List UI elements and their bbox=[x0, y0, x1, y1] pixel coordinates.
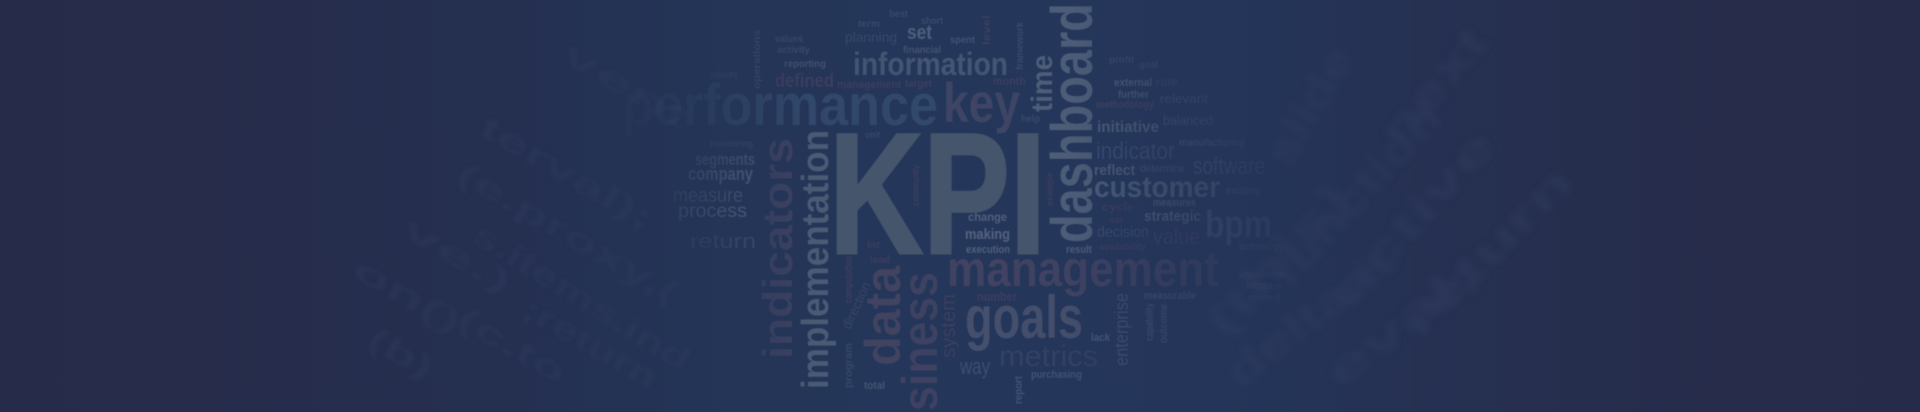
word: key: key bbox=[943, 71, 1020, 134]
reddish words: upper area: community bbox=[911, 165, 922, 206]
word: initiative: initiative bbox=[1097, 119, 1159, 136]
small faint words: upper area: rate bbox=[1156, 75, 1178, 89]
reddish words: lower area: use bbox=[1109, 215, 1124, 226]
small faint words: upper area: short bbox=[921, 16, 944, 27]
reddish words: lower area: number bbox=[977, 289, 1017, 304]
reddish words: upper area: month bbox=[993, 74, 1026, 88]
small faint words: right area: manufacturing bbox=[1179, 137, 1245, 149]
small faint words: left area: return bbox=[690, 231, 756, 253]
small faint words: upper area: profit bbox=[1109, 55, 1135, 66]
small faint words: left area bbox=[673, 150, 890, 392]
small faint words: right area: capability bbox=[1144, 302, 1156, 341]
word: decision: decision bbox=[1097, 224, 1149, 241]
small faint words: right area: relevant bbox=[1160, 91, 1208, 106]
faint rotated background code text, right: (this) bbox=[1196, 173, 1360, 347]
word: further: further bbox=[1118, 89, 1150, 101]
faint rotated background code text, left: ve.) bbox=[396, 210, 518, 301]
word: making: making bbox=[965, 226, 1010, 243]
word: management: management bbox=[947, 241, 1219, 297]
small faint words: right area: technology bbox=[1239, 241, 1284, 253]
reddish words: upper area: level bbox=[982, 15, 993, 45]
small faint words: left area: direction bbox=[838, 279, 874, 331]
small faint words: upper area: industry bbox=[710, 70, 738, 81]
word: system: system bbox=[938, 294, 960, 358]
small faint words: right area: determine bbox=[1140, 163, 1185, 175]
reddish words: upper area: target bbox=[905, 78, 932, 90]
word: external: external bbox=[1114, 77, 1152, 89]
small faint words: right area: software bbox=[1193, 153, 1265, 180]
reddish words: lower area: cycle bbox=[1102, 200, 1134, 214]
small faint words: right area: balanced bbox=[1163, 112, 1213, 128]
small faint words: upper area: reporting bbox=[784, 59, 826, 70]
small faint words: right area: existing bbox=[1226, 185, 1260, 197]
reddish words: upper area bbox=[775, 15, 1056, 206]
small faint words: upper area bbox=[730, 10, 1158, 148]
small faint words: right area: knowledge bbox=[1239, 269, 1285, 281]
small faint words: upper area: planning bbox=[845, 29, 897, 45]
faint rotated background code text, left: (e.proxy,( bbox=[452, 155, 687, 311]
faint rotated background code text, right: active bbox=[1321, 120, 1505, 317]
word: value: value bbox=[1153, 224, 1200, 249]
small faint words: upper area: goal bbox=[1139, 60, 1158, 71]
word: time: time bbox=[1026, 55, 1059, 112]
small faint words: right area: purchasing bbox=[1031, 369, 1082, 381]
word: result: result bbox=[1066, 244, 1092, 256]
small faint words: upper area: unit bbox=[865, 130, 881, 141]
small faint words: right area bbox=[1014, 94, 1242, 404]
word: execution: execution bbox=[966, 244, 1010, 256]
word: siness (cropped business): siness bbox=[892, 272, 948, 411]
faint rotated background code text, right: eval; bbox=[1316, 248, 1488, 398]
small faint words: left area: computation bbox=[843, 256, 855, 303]
faint rotated background code text, left: vent bbox=[556, 35, 696, 136]
faint rotated background code text, left: terval); bbox=[474, 108, 660, 237]
small faint words: upper area: best bbox=[889, 9, 909, 20]
reddish words: upper area: management bbox=[837, 79, 901, 91]
faint rotated background code text, right: next bbox=[1370, 17, 1498, 156]
small faint words: upper area: activity bbox=[777, 45, 810, 56]
small faint words: left area: program bbox=[843, 343, 855, 388]
word: metrics: metrics bbox=[999, 340, 1098, 373]
word: goals: goals bbox=[965, 284, 1083, 351]
small faint words: right area: toward bbox=[1248, 292, 1280, 304]
word: enterprise: enterprise bbox=[1112, 293, 1133, 366]
word: way: way bbox=[959, 354, 990, 379]
title: KPI: KPI bbox=[829, 98, 1046, 290]
word: customer: customer bbox=[1094, 171, 1220, 204]
word: reflect: reflect bbox=[1094, 162, 1135, 179]
word cloud bbox=[675, 6, 1242, 410]
banner background bbox=[357, 0, 1570, 412]
small faint words: left area: process bbox=[678, 201, 747, 222]
word: set: set bbox=[907, 22, 932, 44]
word: information: information bbox=[853, 46, 1008, 82]
faint rotated background code text, right: delta.it bbox=[1216, 236, 1404, 398]
faint rotated background code text, right: slide bbox=[1256, 38, 1364, 175]
reddish words: lower area bbox=[977, 200, 1146, 304]
faint rotated background code text, left: ;return bbox=[516, 290, 664, 396]
small faint words: upper area: framework bbox=[1015, 22, 1026, 70]
reddish words: upper area: defined bbox=[775, 71, 834, 92]
small faint words: right area: outcome bbox=[1158, 304, 1170, 343]
small faint words: upper area: spent bbox=[950, 35, 976, 46]
faint rotated background code text, left: (b) bbox=[362, 320, 440, 386]
word: data: data bbox=[855, 265, 911, 366]
small faint words: upper area: term bbox=[858, 19, 880, 30]
small faint words: upper area: help bbox=[1021, 114, 1040, 125]
faint rotated background code text, left: s.items.ind bbox=[466, 215, 697, 378]
reddish words: upper area: example bbox=[1045, 172, 1056, 206]
small faint words: upper area: financial bbox=[903, 45, 941, 56]
faint rotated background code text, left bbox=[346, 35, 697, 396]
word: performance: performance bbox=[622, 73, 938, 138]
small faint words: right area: report bbox=[1013, 376, 1025, 404]
small faint words: left area: lead bbox=[870, 255, 890, 266]
word: change: change bbox=[968, 210, 1007, 224]
small faint words: left area: company bbox=[688, 164, 753, 184]
word: indicator: indicator bbox=[1096, 138, 1175, 165]
faint rotated background code text, right bbox=[1196, 17, 1583, 398]
word: implementation: implementation bbox=[795, 130, 837, 389]
small faint words: left area: measure bbox=[673, 185, 743, 207]
word: methodology: methodology bbox=[1096, 99, 1155, 111]
small faint words: right area: measures bbox=[1153, 197, 1196, 209]
small faint words: right area: measurable bbox=[1144, 290, 1196, 302]
small faint words: right area: bpm bbox=[1205, 204, 1272, 246]
faint rotated background code text, left: on() bbox=[346, 250, 468, 341]
small faint words: upper area: values bbox=[775, 34, 803, 45]
faint rotated background code text, right: function bbox=[1261, 93, 1451, 297]
faint rotated background code text, left: (c.to bbox=[452, 300, 573, 391]
small faint words: upper area: monitoring bbox=[710, 139, 753, 150]
small faint words: right area: lack bbox=[1091, 332, 1111, 344]
word: strategic: strategic bbox=[1144, 208, 1201, 225]
small faint words: right area: increase bbox=[1246, 280, 1283, 292]
reddish words: lower area: availability bbox=[1099, 242, 1146, 253]
small faint words: left area: list bbox=[867, 240, 881, 251]
small faint words: upper area: operations bbox=[752, 30, 763, 89]
small faint words: left area: total bbox=[864, 380, 885, 392]
small faint words: left area: segments bbox=[695, 150, 755, 169]
word: indicators: indicators bbox=[754, 138, 801, 359]
faint rotated background code text, right: return bbox=[1392, 157, 1583, 347]
